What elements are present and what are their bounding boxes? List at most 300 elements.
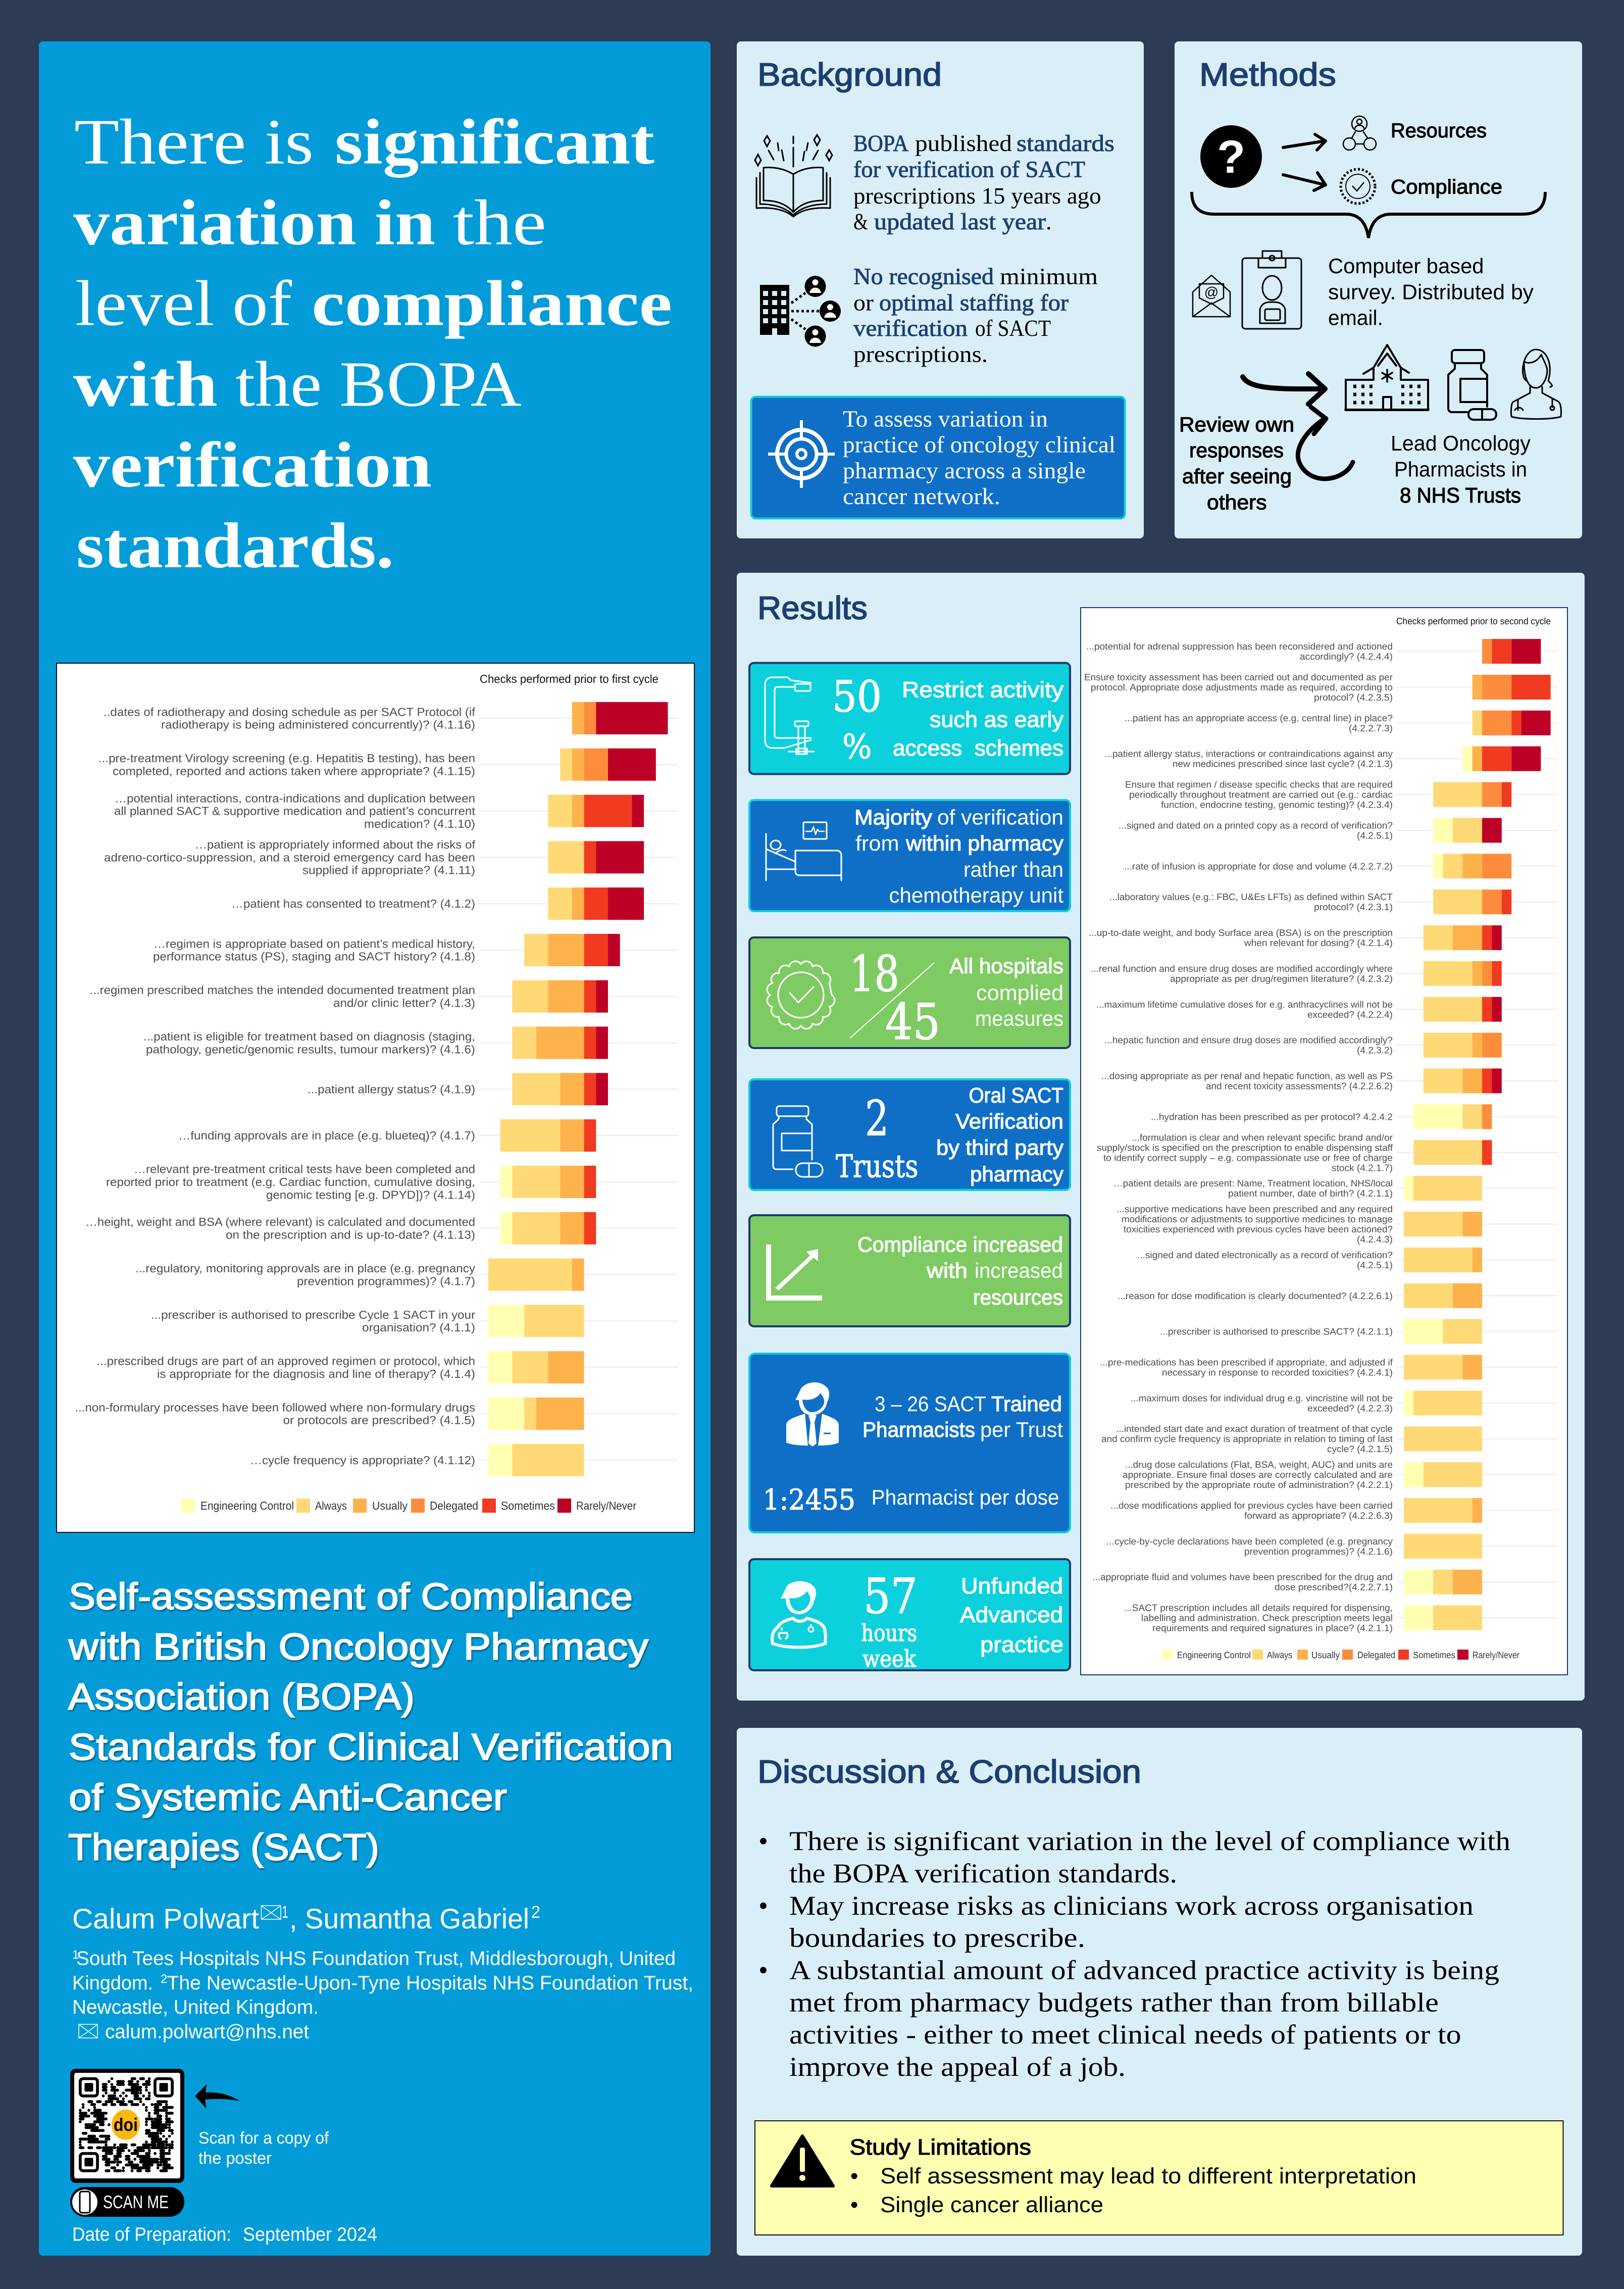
stat: 50 percent: % <box>842 727 872 766</box>
row 4.2.4.2: ...hydration has been prescribed as per protocol? 4.2.4.2 <box>1151 1111 1393 1122</box>
row 4.2.3.2 renal: appropriate as per drug/regimen literature? (4.2.3.2) <box>1170 973 1393 984</box>
icon: hospital <box>1345 345 1429 410</box>
panel: left title column <box>39 41 710 2256</box>
panel: results <box>737 573 1585 1701</box>
row 4.1.11 <box>104 838 678 877</box>
row 4.1.14: genomic testing [e.g. DPYD])? (4.1.14) <box>266 1188 475 1201</box>
stat: pharmacist per dose ratio: 1:2455 <box>763 1483 855 1516</box>
row 4.2.4.4: ...potential for adrenal suppression has been reconsidered and actioned <box>1086 641 1393 652</box>
row 4.1.5 <box>75 1398 678 1430</box>
limitations text: • <box>850 2193 858 2217</box>
row 4.1.3: and/or clinic letter? (4.1.3) <box>333 997 475 1010</box>
row 4.1.7 funding: …funding approvals are in place (e.g. blueteq)? (4.1.7) <box>178 1129 475 1142</box>
text: unfunded advanced practice: Unfunded <box>961 1574 1063 1599</box>
affiliations: South Tees Hospitals NHS Foundation Trust, Middlesborough, United <box>76 1948 676 1970</box>
text: trained pharmacists: Trained <box>991 1392 1062 1416</box>
stat: pharmacist per dose ratio: Pharmacist per dose <box>872 1485 1059 1509</box>
row 4.1.5: ...non-formulary processes have been followed where non-formulary drugs <box>75 1401 475 1414</box>
text: majority <box>854 805 1063 907</box>
subtitle: poster title: Association (BOPA) <box>68 1676 415 1717</box>
main title statement: variation in <box>73 187 435 259</box>
text: survey method: Computer based <box>1328 254 1484 278</box>
row 4.1.2: …patient has consented to treatment? (4.1.2) <box>231 897 475 910</box>
main title statement: level of <box>75 267 292 339</box>
stat: 18 of 45: 45 <box>885 993 940 1051</box>
text: survey method <box>1328 254 1534 330</box>
row 4.2.2.6.2 <box>1101 1069 1558 1093</box>
text: compliance increased: resources <box>973 1285 1063 1309</box>
text: no recognised staffing: optimal staffing for <box>879 290 1069 315</box>
discussion bullets: A substantial amount of advanced practice activity is being <box>789 1955 1499 1985</box>
main title statement: with <box>73 348 218 420</box>
row 4.1.15: completed, reported and actions taken where appropriate? (4.1.15) <box>113 765 475 778</box>
heading: results: Results <box>757 590 868 626</box>
icon: target <box>768 420 835 488</box>
row 4.2.1.5: ...intended start date and exact duration of treatment of that cycle <box>1116 1423 1393 1434</box>
label: resources: Resources <box>1391 120 1487 142</box>
row 4.2.4.4: accordingly? (4.2.4.4) <box>1300 651 1393 662</box>
authors <box>72 1903 540 1934</box>
row 4.2.4.1 <box>1100 1355 1558 1380</box>
chart title: Checks performed prior to second cycle <box>1396 616 1551 626</box>
row 4.1.13: on the prescription and is up-to-date? (4.1.13) <box>226 1228 475 1241</box>
stat: 50 percent: 50 <box>832 672 882 722</box>
text: majority: Majority <box>854 805 932 829</box>
row 4.2.2.6.3 <box>1110 1498 1558 1523</box>
row 4.2.1.1 prescriber <box>1160 1319 1558 1344</box>
text: oral SACT <box>936 1083 1063 1186</box>
card: majority of verification <box>749 800 1070 911</box>
row 4.1.14: reported prior to treatment (e.g. Cardiac function, cumulative dosing, <box>106 1175 475 1188</box>
row 4.2.2.1: ...drug dose calculations (Flat, BSA, weight, AUC) and units are <box>1125 1459 1393 1470</box>
row 4.1.8: …regimen is appropriate based on patient’s medical history, <box>154 937 475 950</box>
text: all hospitals: All hospitals <box>949 954 1063 978</box>
row 4.1.2 <box>231 887 678 920</box>
discussion bullets <box>758 1826 1510 2082</box>
row 4.2.1.7 <box>1097 1132 1558 1173</box>
row 4.1.10: all planned SACT & supportive medication and patient’s concurrent <box>114 805 476 818</box>
text: majority: rather than <box>963 858 1063 881</box>
limitations text: • <box>850 2164 858 2188</box>
row 4.2.1.4 <box>1089 925 1558 950</box>
icon: medicine bottle <box>773 1106 823 1177</box>
text: oral SACT: by third party <box>936 1135 1063 1160</box>
icon: email: @ <box>1204 284 1219 300</box>
row 4.2.1.5: and confirm cycle frequency is appropriate in relation to timing of last <box>1101 1433 1393 1444</box>
chart title: Checks performed prior to first cycle <box>480 672 658 685</box>
icon: pharmacist woman <box>1511 350 1561 419</box>
text: no recognised staffing <box>853 264 1098 367</box>
heading: background: Background <box>757 56 942 92</box>
row 4.2.2.1: prescribed by the appropriate route of administration? (4.2.2.1) <box>1125 1479 1393 1490</box>
text: compliance increased: Compliance increased <box>857 1233 1063 1257</box>
panel: methods <box>1175 41 1582 538</box>
row 4.2.5.1 electronic <box>1137 1248 1558 1272</box>
text: BOPA standards <box>853 130 1114 234</box>
main title statement: the <box>453 187 546 259</box>
legend: second cycle chart: Usually <box>1311 1650 1340 1660</box>
text: no recognised staffing: of SACT <box>975 315 1051 341</box>
stat: 2 trusts: Trusts <box>836 1148 918 1185</box>
callout: study limitations <box>755 2121 1563 2235</box>
row 4.2.2.7.3: ...patient has an appropriate access (e.g. central line) in place? <box>1125 713 1393 723</box>
row 4.2.1.7: stock (4.2.1.7) <box>1332 1162 1393 1173</box>
row 4.1.15 <box>98 749 678 781</box>
row 4.1.10 <box>114 791 678 830</box>
subtitle: poster title: Therapies (SACT) <box>68 1826 379 1868</box>
text: trained pharmacists <box>862 1392 1063 1441</box>
row 4.2.2.6.1: ...reason for dose modification is clearly documented? (4.2.2.6.1) <box>1118 1290 1393 1301</box>
main title statement <box>73 106 672 581</box>
text: oral SACT: Oral SACT <box>969 1083 1063 1107</box>
aim callout <box>751 397 1125 518</box>
row 4.2.2.1: appropriate. Ensure final doses are correctly calculated and are <box>1123 1469 1393 1480</box>
text: compliance increased <box>857 1233 1063 1309</box>
text: restrict activity: Restrict activity <box>902 678 1063 703</box>
row 4.2.5.1 electronic: ...signed and dated electronically as a record of verification? <box>1137 1250 1393 1260</box>
row 4.1.16: ..dates of radiotherapy and dosing schedule as per SACT Protocol (if <box>104 705 476 718</box>
card: compliance increased <box>749 1215 1070 1326</box>
text: no recognised staffing: No recognised <box>853 264 994 289</box>
arrows to resources and compliance <box>1283 134 1326 190</box>
icon: open book <box>755 135 832 217</box>
text: trained pharmacists: Pharmacists <box>862 1418 975 1441</box>
row 4.2.3.1 <box>1109 889 1558 914</box>
legend: second cycle chart: Engineering Control <box>1177 1650 1251 1660</box>
row 4.1.1 <box>151 1305 678 1337</box>
authors: 1 <box>282 1903 288 1922</box>
row 4.1.10: medication? (4.1.10) <box>364 817 475 830</box>
icon: building staffing network <box>760 276 841 346</box>
row 4.2.2.3 <box>1131 1390 1558 1415</box>
affiliations <box>72 1948 693 2043</box>
row 4.2.1.6: ...cycle-by-cycle declarations have been completed (e.g. pregnancy <box>1106 1536 1393 1547</box>
row 4.2.1.1 SACT prescription: labelling and administration. Check prescription meets legal <box>1141 1613 1393 1623</box>
scan me pill <box>70 2187 184 2217</box>
row 4.1.14: …relevant pre-treatment critical tests have been completed and <box>134 1163 475 1176</box>
row 4.2.4.2 <box>1151 1104 1558 1129</box>
row 4.1.3: ...regimen prescribed matches the intended documented treatment plan <box>90 983 475 997</box>
legend: second cycle chart: Delegated <box>1357 1650 1395 1660</box>
row 4.1.5: or protocols are prescribed? (4.1.5) <box>283 1414 475 1427</box>
text: participants: 8 NHS Trusts <box>1400 483 1521 507</box>
row 4.2.4.3: ...supportive medications have been prescribed and any required <box>1116 1204 1393 1214</box>
row 4.2.2.7.1: ...appropriate fluid and volumes have been prescribed for the drug and <box>1092 1572 1393 1582</box>
icon: medicine bottle <box>1448 350 1496 420</box>
discussion bullets: the BOPA verification standards. <box>789 1858 1177 1888</box>
discussion bullets: May increase risks as clinicians work across organisation <box>789 1890 1474 1921</box>
text: BOPA standards: updated last year <box>874 209 1046 234</box>
affiliations: 2 <box>161 1972 167 1986</box>
row 4.1.13: …height, weight and BSA (where relevant) is calculated and documented <box>85 1215 475 1228</box>
row 4.1.10: …potential interactions, contra-indications and duplication between <box>115 791 475 805</box>
main title statement: verification <box>73 429 432 501</box>
card: restrict activity <box>749 663 1070 774</box>
main title statement: the BOPA <box>235 348 522 420</box>
subtitle: poster title: Self-assessment of Compliance <box>69 1575 633 1617</box>
legend: second cycle chart: Sometimes <box>1413 1650 1455 1660</box>
arrow pointing to QR code <box>195 2084 240 2109</box>
aim text: practice of oncology clinical <box>843 432 1115 458</box>
affiliations: Newcastle, United Kingdom. <box>72 1997 319 2018</box>
row 4.2.2.3: exceeded? (4.2.2.3) <box>1307 1403 1393 1413</box>
row 4.2.3.5 <box>1084 672 1558 703</box>
scan caption <box>198 2128 329 2167</box>
QR code <box>70 2069 184 2183</box>
row 4.2.1.5: cycle? (4.2.1.5) <box>1327 1444 1393 1454</box>
row 4.1.9: ...patient allergy status? (4.1.9) <box>308 1082 475 1096</box>
row 4.1.1: organisation? (4.1.1) <box>362 1321 475 1334</box>
discussion bullets: • <box>758 1955 768 1985</box>
text: survey method: survey. Distributed by <box>1328 280 1534 304</box>
row 4.2.3.2 renal <box>1091 961 1558 986</box>
authors: , Sumantha Gabriel <box>289 1903 529 1934</box>
affiliations: The Newcastle-Upon-Tyne Hospitals NHS Foundation Trust, <box>167 1972 693 1994</box>
row 4.1.4 <box>97 1351 678 1383</box>
row 4.1.12: …cycle frequency is appropriate? (4.1.12) <box>250 1454 475 1467</box>
text: BOPA standards: . <box>1046 209 1051 234</box>
panel: background <box>737 41 1144 538</box>
discussion bullets: met from pharmacy budgets rather than from billable <box>789 1987 1439 2018</box>
legend: second cycle chart <box>1162 1650 1519 1660</box>
row 4.1.3 <box>90 980 678 1013</box>
icon: question mark <box>1200 125 1262 188</box>
row 4.1.7 funding <box>178 1119 678 1152</box>
row 4.2.2.7.3: (4.2.2.7.3) <box>1349 723 1393 733</box>
icon: email <box>1193 275 1230 317</box>
discussion bullets: activities - either to meet clinical needs of patients or to <box>789 2019 1461 2050</box>
discussion bullets: • <box>758 1890 768 1921</box>
main title statement: There is <box>74 106 314 178</box>
row 4.1.12 <box>250 1444 678 1476</box>
row 4.2.1.1 patient details <box>1113 1176 1558 1201</box>
row 4.1.8: performance status (PS), staging and SACT history? (4.1.8) <box>153 950 475 963</box>
text: compliance increased: increased <box>975 1259 1063 1282</box>
row 4.2.1.1 prescriber: ...prescriber is authorised to prescribe SACT? (4.2.1.1) <box>1160 1326 1393 1337</box>
row 4.2.1.3 <box>1104 747 1558 771</box>
row 4.2.4.1: ...pre-medications has been prescribed if appropriate, and adjusted if <box>1100 1357 1393 1368</box>
row 4.1.1: ...prescriber is authorised to prescribe Cycle 1 SACT in your <box>151 1308 475 1321</box>
subtitle: poster title: of Systemic Anti-Cancer <box>69 1776 507 1818</box>
row 4.1.7 regulatory: prevention programmes)? (4.1.7) <box>297 1274 475 1287</box>
text: all hospitals <box>949 954 1063 1030</box>
text: review responses: responses <box>1189 439 1284 462</box>
stat: 57 hours per week: week <box>862 1645 917 1672</box>
icon: clamp <box>765 677 814 754</box>
text: majority: chemotherapy unit <box>889 883 1063 907</box>
limitations text <box>850 2135 1416 2217</box>
text: BOPA standards: & <box>853 209 868 234</box>
row 4.2.3.4 <box>1125 779 1558 810</box>
authors: Calum Polwart <box>72 1903 259 1934</box>
stat: pharmacist per dose ratio <box>763 1483 1059 1516</box>
row 4.2.2.7.1 <box>1092 1570 1558 1595</box>
row 4.1.13 <box>85 1212 678 1245</box>
icon: resources <box>1343 116 1376 150</box>
text: BOPA standards: BOPA <box>853 130 908 156</box>
text: BOPA standards: prescriptions 15 years ago <box>853 183 1101 209</box>
row 4.2.2.6.2: and recent toxicity assessments? (4.2.2.6.2) <box>1206 1081 1393 1091</box>
limitations text: Single cancer alliance <box>880 2193 1103 2217</box>
subtitle: poster title: with British Oncology Pharmacy <box>68 1625 648 1667</box>
row 4.2.1.1 SACT prescription: ...SACT prescription includes all details required for dispensing, <box>1124 1603 1393 1613</box>
heading: discussion: Discussion & Conclusion <box>757 1754 1141 1790</box>
text: restrict activity <box>893 678 1063 761</box>
row 4.2.1.4: ...up-to-date weight, and body Surface area (BSA) is on the prescription <box>1089 927 1393 938</box>
date of preparation <box>72 2224 377 2246</box>
row 4.2.1.4: when relevant for dosing? (4.2.1.4) <box>1244 937 1393 948</box>
row 4.2.3.4: periodically throughout treatment are carried out (e.g.: cardiac <box>1129 789 1393 800</box>
row 4.2.4.3: modifications or adjustments to supportive medicines to manage <box>1122 1214 1393 1224</box>
text: no recognised staffing: minimum <box>1000 264 1098 289</box>
affiliations: 1 <box>72 1948 79 1962</box>
row 4.2.2.6.3: forward as appropriate? (4.2.2.6.3) <box>1244 1510 1393 1521</box>
row 4.1.11: …patient is appropriately informed about the risks of <box>195 838 476 851</box>
card: trained pharmacists <box>749 1354 1070 1532</box>
text: trained pharmacists: 3 – 26 SACT <box>875 1392 986 1416</box>
text: participants: Pharmacists in <box>1394 458 1527 481</box>
legend: second cycle chart: Rarely/Never <box>1473 1650 1519 1660</box>
row 4.1.7 regulatory <box>135 1259 678 1291</box>
scan me pill: SCAN ME <box>103 2192 169 2212</box>
authors: 2 <box>531 1903 540 1922</box>
text: majority: within pharmacy <box>905 831 1063 855</box>
row 4.1.6 <box>143 1027 678 1059</box>
icon: verified badge <box>767 961 835 1029</box>
row 4.2.1.6 <box>1106 1534 1558 1559</box>
text: BOPA standards: for verification of SACT <box>853 157 1085 182</box>
text: review responses: Review own <box>1179 413 1294 436</box>
row 4.2.5.1 printed: (4.2.5.1) <box>1357 830 1393 840</box>
row 4.2.3.4: function, endocrine testing, genomic testing)? (4.2.3.4) <box>1161 800 1393 810</box>
row 4.2.2.3: ...maximum doses for individual drug e.g. vincristine will not be <box>1131 1392 1393 1403</box>
text: survey method: email. <box>1328 306 1383 330</box>
row 4.2.3.2 hepatic: (4.2.3.2) <box>1357 1045 1393 1056</box>
text: review responses: after seeing <box>1182 465 1292 488</box>
heading: methods: Methods <box>1199 56 1336 92</box>
legend: second cycle chart: Always <box>1267 1650 1292 1660</box>
row 4.2.2.7.2: ...rate of infusion is appropriate for dose and volume (4.2.2.7.2) <box>1124 861 1393 871</box>
text: BOPA standards: published <box>915 130 1012 156</box>
text: review responses <box>1179 413 1294 514</box>
row 4.1.11: supplied if appropriate? (4.1.11) <box>302 864 475 877</box>
discussion bullets: boundaries to prescribe. <box>789 1923 1085 1953</box>
row 4.2.4.4 <box>1086 639 1558 664</box>
row 4.2.4.3 <box>1116 1204 1558 1245</box>
main title statement: significant <box>335 106 654 178</box>
row 4.2.3.2 renal: ...renal function and ensure drug doses are modified accordingly where <box>1091 963 1393 974</box>
text: participants: Lead Oncology <box>1391 431 1531 455</box>
row 4.1.14 <box>106 1163 678 1201</box>
row 4.2.2.4: ...maximum lifetime cumulative doses for e.g. anthracyclines will not be <box>1096 999 1393 1010</box>
icon: question mark: ? <box>1217 131 1245 183</box>
limitations text: Self assessment may lead to different interpretation <box>880 2164 1416 2188</box>
stat: 2 trusts <box>836 1090 918 1185</box>
discussion bullets: improve the appeal of a job. <box>789 2052 1126 2082</box>
card: oral SACT verification <box>749 1079 1070 1190</box>
discussion bullets: There is significant variation in the level of compliance with <box>789 1826 1510 1856</box>
row 4.2.1.7: supply/stock is specified on the prescription to enable dispensing staff <box>1097 1142 1393 1153</box>
text: oral SACT: pharmacy <box>970 1162 1063 1186</box>
chart: checks performed prior to second cycle <box>1081 608 1567 1675</box>
text: unfunded advanced practice: practice <box>980 1632 1063 1657</box>
row 4.2.4.3: toxicities experienced with previous cycles have been actioned? <box>1124 1224 1393 1234</box>
row 4.2.1.3: new medicines prescribed since last cycle? (4.2.1.3) <box>1173 759 1393 769</box>
text: compliance increased: with <box>926 1259 968 1282</box>
text: no recognised staffing: prescriptions. <box>853 341 988 367</box>
row 4.2.1.1 SACT prescription: requirements and required signatures in place? (4.2.1.1) <box>1152 1623 1393 1633</box>
row 4.2.2.4: exceeded? (4.2.2.4) <box>1307 1009 1393 1020</box>
row 4.2.1.7: to identify correct supply – e.g. compassionate use or free of charge <box>1103 1152 1393 1163</box>
row 4.1.4: ...prescribed drugs are part of an approved regimen or protocol, which <box>97 1355 475 1368</box>
row 4.2.1.5 <box>1101 1423 1558 1454</box>
aim text <box>843 406 1115 509</box>
doi badge <box>112 2110 140 2140</box>
chart: checks performed prior to first cycle <box>57 663 694 1532</box>
stat: 18 of 45: 18 <box>849 946 899 1003</box>
row 4.2.1.7: ...formulation is clear and when relevant specific brand and/or <box>1132 1132 1393 1142</box>
text: all hospitals: complied <box>976 981 1063 1005</box>
scan caption: Scan for a copy of <box>198 2128 329 2147</box>
text: trained pharmacists: per Trust <box>980 1418 1063 1441</box>
row 4.2.3.1: ...laboratory values (e.g.: FBC, U&Es LFTs) as defined within SACT <box>1109 891 1393 902</box>
row 4.1.8 <box>153 934 678 966</box>
legend: first cycle chart <box>181 1499 636 1513</box>
row 4.2.2.7.2 <box>1124 854 1558 878</box>
text: unfunded advanced practice: Advanced <box>960 1603 1063 1627</box>
text: no recognised staffing: verification <box>853 315 968 341</box>
affiliations: Kingdom. <box>72 1972 153 1994</box>
row 4.2.2.6.3: ...dose modifications applied for previous cycles have been carried <box>1110 1500 1393 1511</box>
icon: doctor <box>772 1581 826 1648</box>
legend: first cycle chart: Sometimes <box>501 1499 555 1512</box>
arrow: curved to trusts <box>1243 374 1325 404</box>
icon: rising chart <box>766 1245 822 1301</box>
row 4.2.2.6.2: ...dosing appropriate as per renal and hepatic function, as well as PS <box>1101 1071 1393 1081</box>
row 4.2.5.1 printed: ...signed and dated on a printed copy as a record of verification? <box>1119 820 1393 830</box>
affiliations: calum.polwart@nhs.net <box>105 2021 309 2043</box>
text: majority: of verification <box>937 805 1063 829</box>
stat: 57 hours per week: 57 <box>864 1568 918 1625</box>
row 4.1.4: is appropriate for the diagnosis and line of therapy? (4.1.4) <box>157 1367 475 1380</box>
row 4.2.3.5: Ensure toxicity assessment has been carried out and documented as per <box>1084 672 1393 682</box>
row 4.1.16: radiotherapy is being administered concurrently)? (4.1.16) <box>161 718 475 731</box>
icon: compliance badge <box>1341 169 1375 204</box>
row 4.1.6: ...patient is eligible for treatment based on diagnosis (staging, <box>143 1030 475 1043</box>
subtitle: poster title: Standards for Clinical Verification <box>69 1726 673 1768</box>
row 4.2.1.6: prevention programmes)? (4.2.1.6) <box>1244 1546 1393 1557</box>
aim text: To assess variation in <box>843 406 1048 432</box>
text: BOPA standards: standards <box>1017 130 1114 156</box>
row 4.2.3.2 hepatic <box>1104 1033 1558 1058</box>
brace <box>1192 192 1545 238</box>
discussion bullets: • <box>758 1826 768 1856</box>
row 4.2.1.1 patient details: …patient details are present: Name, Treatment location, NHS/local <box>1113 1178 1393 1188</box>
row 4.1.7 regulatory: ...regulatory, monitoring approvals are in place (e.g. pregnancy <box>135 1262 476 1275</box>
row 4.1.16 <box>104 702 678 734</box>
stat: 57 hours per week <box>861 1568 918 1672</box>
panel: discussion and conclusion <box>737 1728 1582 2256</box>
row 4.2.4.1: necessary in response to recorded toxicities? (4.2.4.1) <box>1162 1367 1393 1378</box>
main title statement: standards. <box>76 510 394 581</box>
text: all hospitals: measures <box>975 1007 1063 1030</box>
aim text: pharmacy across a single <box>843 458 1086 483</box>
row 4.2.3.1: protocol? (4.2.3.1) <box>1314 902 1393 912</box>
date of preparation: Date of Preparation: <box>72 2224 231 2246</box>
main title statement: compliance <box>312 267 672 339</box>
legend: first cycle chart: Usually <box>372 1499 408 1512</box>
text: restrict activity: such as early <box>930 707 1063 732</box>
